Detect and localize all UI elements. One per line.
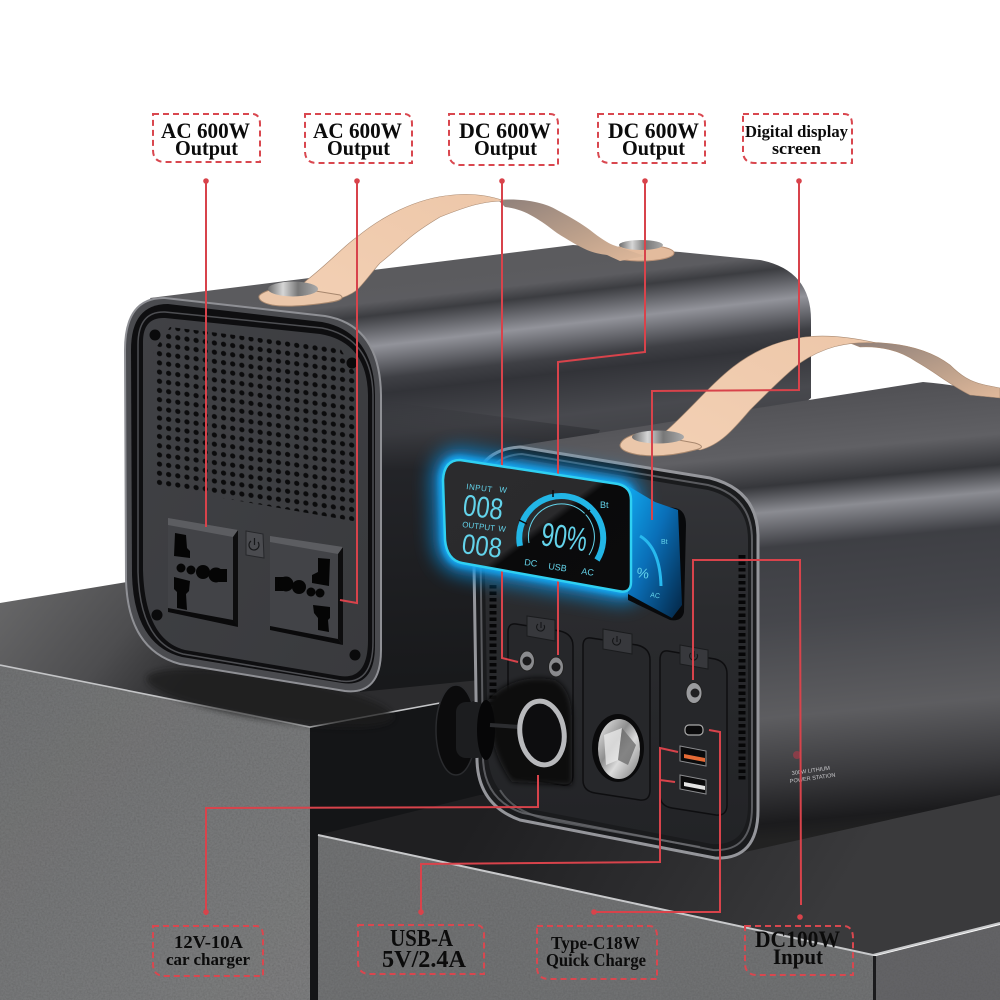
car charger shadow <box>488 678 572 785</box>
leader: DC 600W right <box>558 181 645 655</box>
strap top <box>290 194 505 305</box>
handle pad right <box>608 245 674 261</box>
front unit handle <box>620 336 1000 456</box>
strap underside <box>498 200 645 261</box>
block top: left surface <box>0 582 480 727</box>
USB-C port <box>685 725 703 735</box>
rear unit body <box>150 245 811 692</box>
leader: Type-C <box>594 730 720 912</box>
input unit: W <box>499 485 508 495</box>
rear face panel <box>143 318 368 676</box>
bluetooth mark: Bt <box>600 500 609 510</box>
speaker grille <box>153 327 358 522</box>
heading: AC 600W Output left: AC 600W <box>161 118 250 143</box>
rear display screen: Bt <box>661 539 668 546</box>
handle rivet <box>632 430 684 444</box>
front power station <box>436 336 1000 858</box>
heading: USB-A 5V/2.4A: 5V/2.4A <box>382 947 467 973</box>
input value: 008 <box>461 489 505 527</box>
block: right top surface <box>318 780 1000 955</box>
callout leader lines <box>206 181 801 915</box>
rear display screen <box>628 486 686 620</box>
output unit: W <box>498 524 507 534</box>
side logo: 300W LITHIUM <box>791 766 831 777</box>
box: AC 600W left <box>153 114 260 162</box>
callout labels <box>153 114 853 979</box>
heading: DC 600W Output right <box>608 118 699 160</box>
box: DC 600W left <box>449 114 558 165</box>
power tabs <box>527 616 708 669</box>
heading: AC 600W Output right: AC 600W <box>313 118 402 143</box>
heading: DC 600W Output right: DC 600W <box>608 118 699 143</box>
box: Type-C <box>537 926 657 979</box>
heading: Digital display screen: Digital display <box>745 122 848 141</box>
heading: DC 600W Output left: Output <box>474 136 537 160</box>
box: USB-A <box>358 925 484 974</box>
heading: AC 600W Output left: Output <box>175 136 238 160</box>
side gauge <box>640 536 661 586</box>
side logo <box>789 751 836 785</box>
box: AC 600W right <box>305 114 412 163</box>
screws <box>150 330 360 660</box>
heading: 12V-10A car charger <box>166 932 250 969</box>
heading: 12V-10A car charger: 12V-10A <box>174 932 243 952</box>
heading: AC 600W Output left <box>161 118 250 160</box>
output label: OUTPUT <box>462 520 496 533</box>
handle rivet right <box>619 240 663 250</box>
front face panel <box>484 459 748 844</box>
USB-A port standard <box>680 775 706 794</box>
car charger socket <box>516 698 568 768</box>
handle pad <box>620 433 702 456</box>
display body <box>443 460 631 592</box>
gauge label DC: DC <box>524 557 538 569</box>
bottom ridges <box>500 790 700 847</box>
heading: AC 600W Output right: Output <box>327 136 390 160</box>
box: DC100W <box>745 926 853 975</box>
AC socket right <box>270 536 343 645</box>
rear power station <box>125 194 811 692</box>
heading: USB-A 5V/2.4A: USB-A <box>390 926 454 952</box>
leader dots <box>203 178 803 920</box>
heading: 12V-10A car charger: car charger <box>166 950 250 969</box>
leader: AC 600W right <box>340 181 357 603</box>
power button rear <box>246 531 264 558</box>
block: front gray face <box>318 835 873 1000</box>
gauge label USB: USB <box>548 561 567 574</box>
side label: AC <box>650 592 660 600</box>
box: car charger <box>153 926 263 976</box>
heading: DC100W Input: DC100W <box>755 927 840 952</box>
vent left <box>490 585 496 705</box>
front face rim <box>473 447 758 858</box>
leader: DC100W input <box>693 560 801 905</box>
leader: car charger <box>206 775 538 915</box>
leader: AC 600W left <box>205 181 207 527</box>
leader: digital display <box>652 181 799 520</box>
platform: stone blocks <box>0 582 1000 1000</box>
side logo: POWER STATION <box>789 773 836 785</box>
leader: USB-A <box>421 748 678 915</box>
rear face rim <box>125 298 381 691</box>
block: corner gray face <box>876 925 1000 1000</box>
DC jacks <box>520 651 702 704</box>
AC socket left <box>168 518 238 627</box>
block: right dark face <box>310 700 500 1000</box>
percentage: 90% <box>539 515 590 558</box>
heading: USB-A 5V/2.4A <box>382 926 467 973</box>
input label: INPUT <box>466 482 493 494</box>
blue side glass <box>628 486 682 618</box>
gauge <box>519 490 603 560</box>
heading: DC100W Input <box>755 927 840 969</box>
box: digital display <box>743 114 852 163</box>
vent right <box>738 555 746 780</box>
front unit body <box>500 382 1000 858</box>
output value: 008 <box>460 528 504 564</box>
rear unit handle <box>259 194 674 306</box>
shadow beneath rear unit <box>143 657 397 739</box>
heading: Digital display screen <box>745 122 848 158</box>
port panels <box>508 624 727 815</box>
rear display screen: % <box>636 564 650 582</box>
heading: Type-C18W Quick Charge <box>546 933 646 970</box>
heading: Digital display screen: screen <box>772 139 822 158</box>
block: left gray face <box>0 665 310 1000</box>
heading: Type-C18W Quick Charge: Type-C18W <box>551 933 640 953</box>
strap top <box>655 336 877 450</box>
LCD display panel <box>443 460 631 592</box>
LCD glow <box>443 460 631 592</box>
heading: DC 600W Output left: DC 600W <box>459 118 551 143</box>
heading: DC 600W Output left <box>459 118 551 160</box>
heading: Type-C18W Quick Charge: Quick Charge <box>546 950 646 970</box>
heading: DC 600W Output right: Output <box>622 136 685 160</box>
handle rivet left <box>268 282 318 296</box>
gauge label AC: AC <box>581 566 595 578</box>
handle pad left <box>259 286 342 306</box>
heading: AC 600W Output right <box>313 118 402 160</box>
flashlight <box>592 714 644 782</box>
far strap <box>850 342 1000 398</box>
plug knob <box>436 685 520 775</box>
box: DC 600W right <box>598 114 705 163</box>
heading: DC100W Input: Input <box>773 944 824 969</box>
USB-A port quick <box>680 746 706 766</box>
leader: DC 600W left <box>502 181 518 662</box>
